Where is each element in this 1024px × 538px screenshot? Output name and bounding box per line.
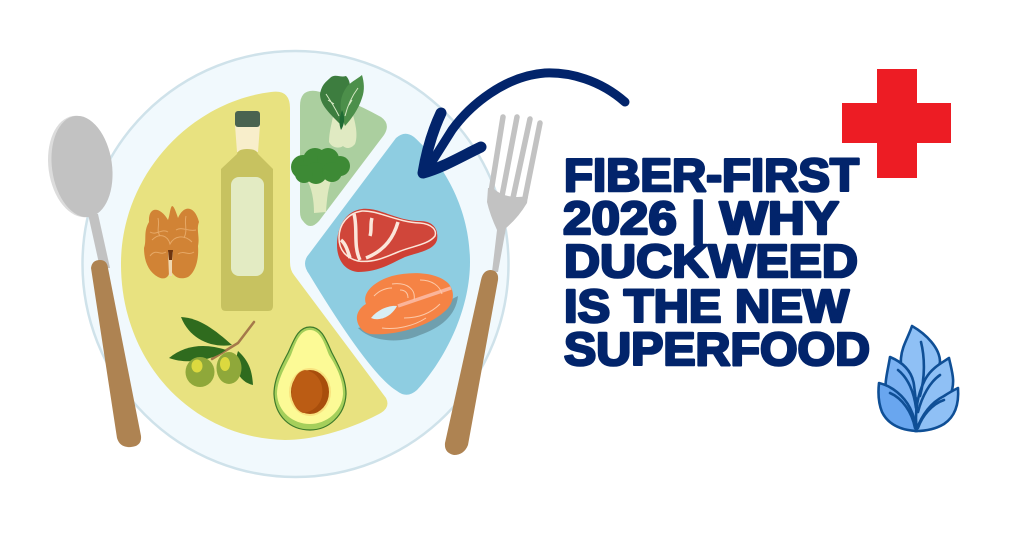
icon: olive oil bottle [221, 111, 273, 311]
title: 2026 | WHY [563, 192, 839, 244]
title: SUPERFOOD [564, 323, 870, 375]
icon: walnut [144, 206, 199, 278]
icon: avocado [274, 327, 346, 430]
icon: steak [337, 209, 437, 272]
icon: olive branch [169, 317, 254, 387]
icon: red medical cross [842, 69, 951, 178]
icon: fork [445, 117, 540, 455]
arrow pointing to blue section [423, 73, 625, 173]
panel: yellow fats section [121, 92, 387, 440]
title: DUCKWEED [564, 235, 858, 287]
icon: spoon [42, 112, 141, 447]
icon: salmon steak [357, 273, 458, 340]
title: FIBER-FIRST [564, 149, 859, 201]
title: IS THE NEW [564, 280, 850, 332]
plate [82, 51, 508, 477]
panel: blue protein section [305, 134, 470, 395]
icon: broccoli [291, 148, 350, 213]
icon: blue leaf [878, 326, 958, 431]
icon: bok choy [320, 75, 364, 148]
panel: green vegetable section [300, 91, 387, 226]
title [563, 149, 870, 375]
